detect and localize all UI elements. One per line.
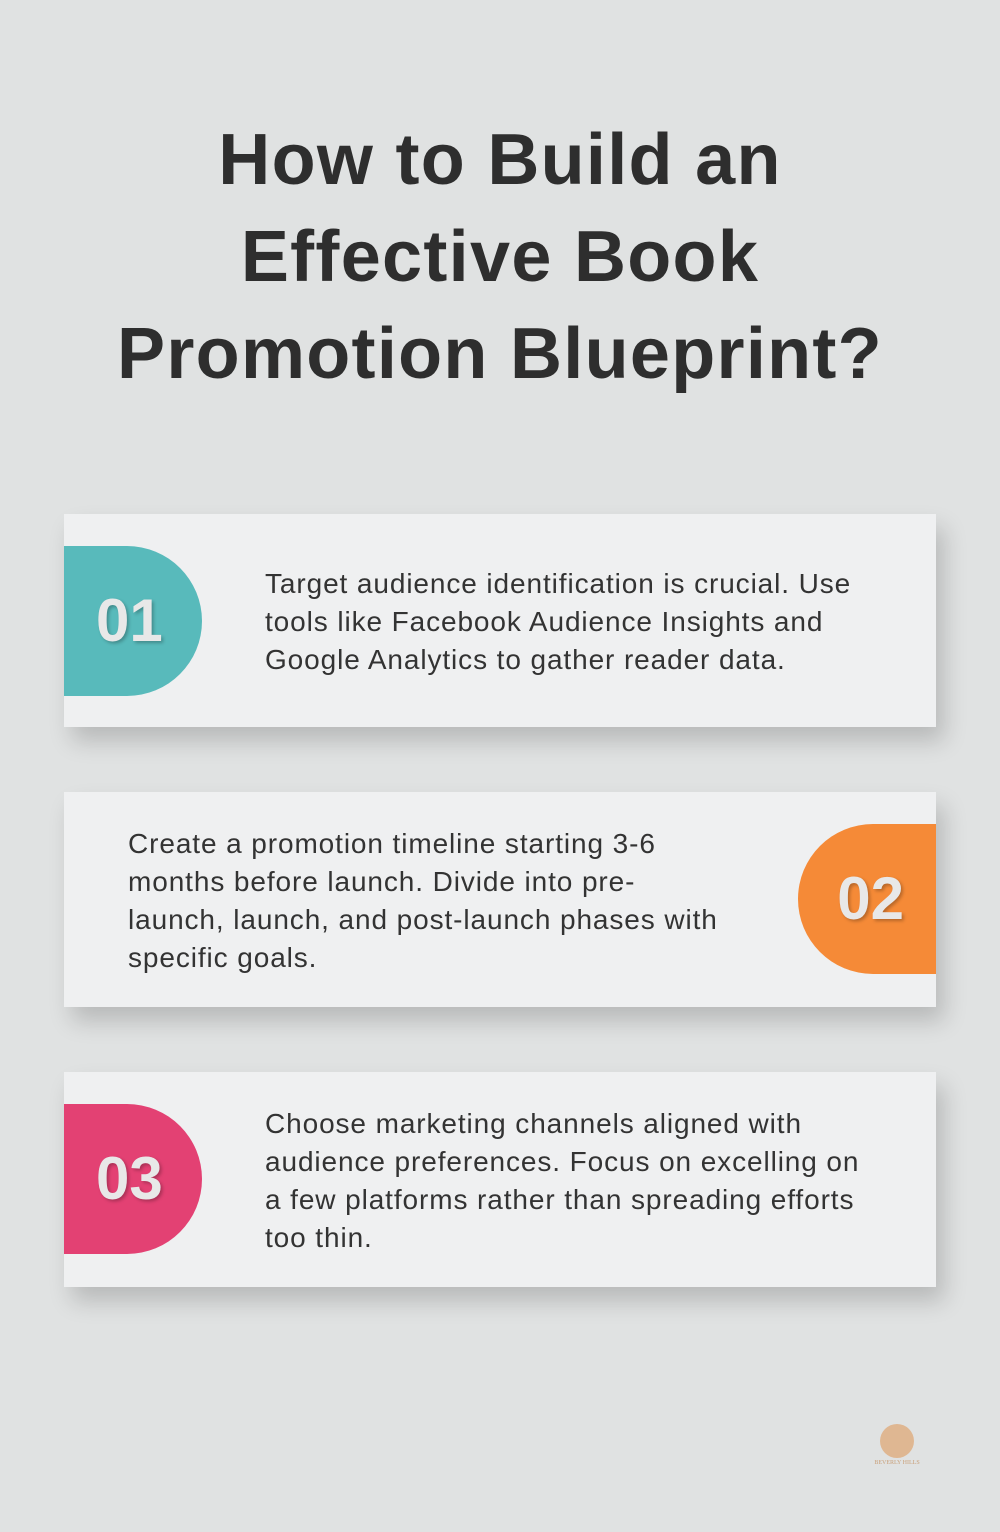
title: How to Build an (218, 120, 782, 200)
text 03: a few platforms rather than spreading efforts (265, 1184, 854, 1215)
badge 01 (64, 546, 202, 696)
text 03: audience preferences. Focus on excelling on (265, 1146, 859, 1177)
text 01: Target audience identification is crucial. Use (265, 568, 851, 599)
title: Effective Book (241, 217, 759, 297)
badge 03 (64, 1104, 202, 1254)
text 01: tools like Facebook Audience Insights and (265, 606, 823, 637)
text 03 (265, 1108, 859, 1253)
text 02: specific goals. (128, 942, 317, 973)
text 02: launch, launch, and post-launch phases with (128, 904, 718, 935)
title (117, 120, 883, 394)
text 02: Create a promotion timeline starting 3-6 (128, 828, 656, 859)
badge 02 (798, 824, 936, 974)
text 03: Choose marketing channels aligned with (265, 1108, 802, 1139)
badge 03: 03 (96, 1145, 163, 1212)
text 01 (265, 568, 851, 675)
logo: BEVERLY HILLS (874, 1460, 920, 1466)
panel: step 02 (64, 792, 936, 1007)
badge 02: 02 (837, 865, 904, 932)
text 02: months before launch. Divide into pre- (128, 866, 635, 897)
text 02 (128, 828, 718, 973)
title: Promotion Blueprint? (117, 314, 883, 394)
text 03: too thin. (265, 1222, 373, 1253)
badge 01: 01 (96, 587, 163, 654)
panel: step 01 (64, 514, 936, 727)
panel: step 03 (64, 1072, 936, 1287)
logo (874, 1424, 920, 1466)
text 01: Google Analytics to gather reader data. (265, 644, 786, 675)
